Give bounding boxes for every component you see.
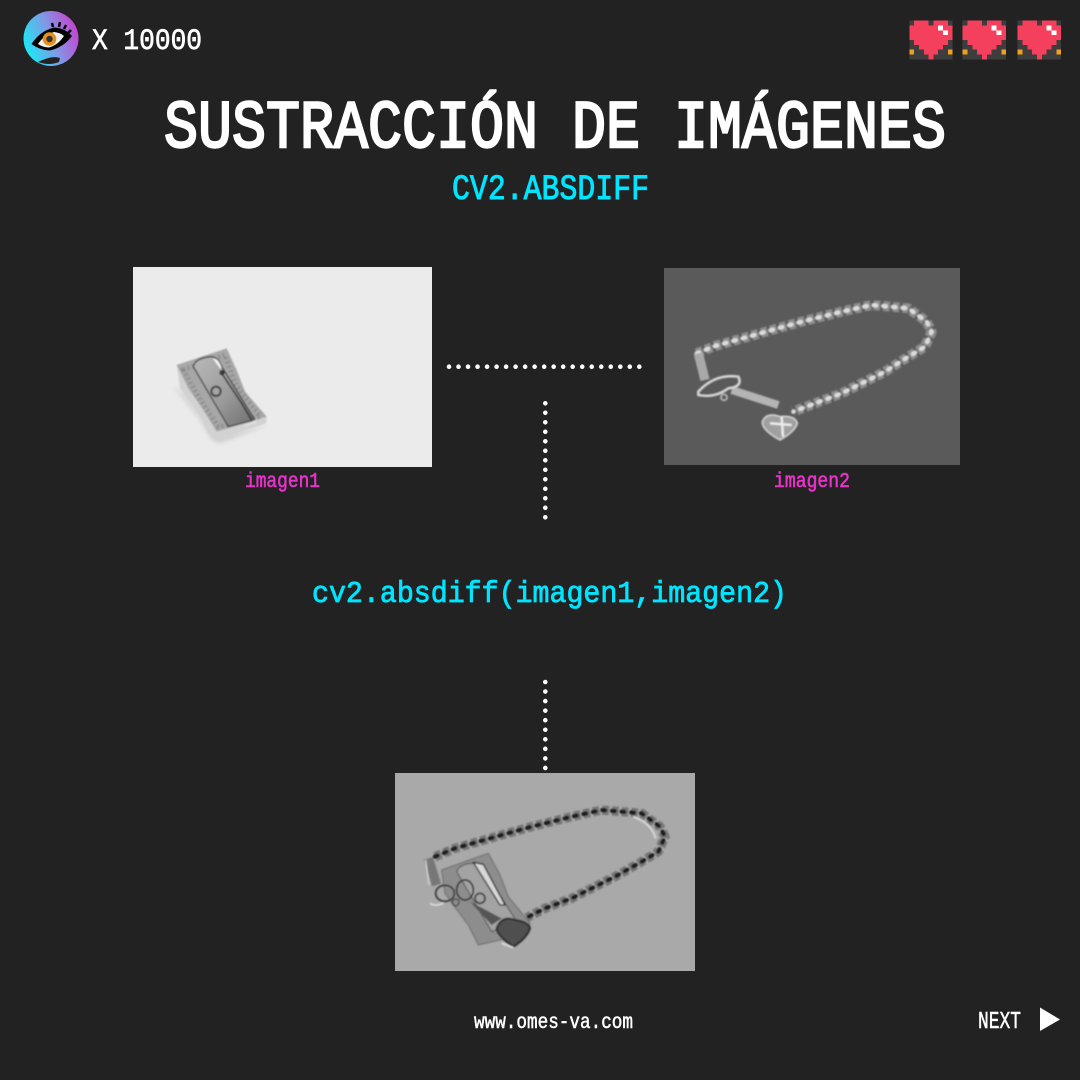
label: imagen1: imagen1 — [245, 471, 320, 494]
image 2: bracelet — [664, 268, 960, 465]
icon: eye logo — [24, 11, 78, 66]
dotted connector: horizontal — [449, 364, 640, 369]
icon: pixel heart 2 — [963, 21, 1006, 59]
next label: NEXT — [978, 1009, 1021, 1036]
website: www.omes-va.com — [474, 1012, 633, 1035]
title: SUSTRACCIÓN DE IMÁGENES — [164, 89, 946, 168]
image 1: sharpener — [133, 267, 432, 467]
score counter: X 10000 — [92, 25, 202, 59]
function call: cv2.absdiff(imagen1,imagen2) — [312, 577, 787, 612]
dotted connector: vertical lower — [543, 682, 548, 769]
dotted connector: vertical upper — [543, 403, 548, 518]
icon: pixel heart 3 — [1018, 21, 1061, 59]
icon: next arrow — [1040, 1008, 1060, 1031]
subtitle: CV2.ABSDIFF — [452, 170, 649, 210]
icon: pixel heart 1 — [909, 21, 953, 59]
label: imagen2: imagen2 — [774, 471, 850, 494]
image 3: absolute difference result — [395, 773, 695, 971]
